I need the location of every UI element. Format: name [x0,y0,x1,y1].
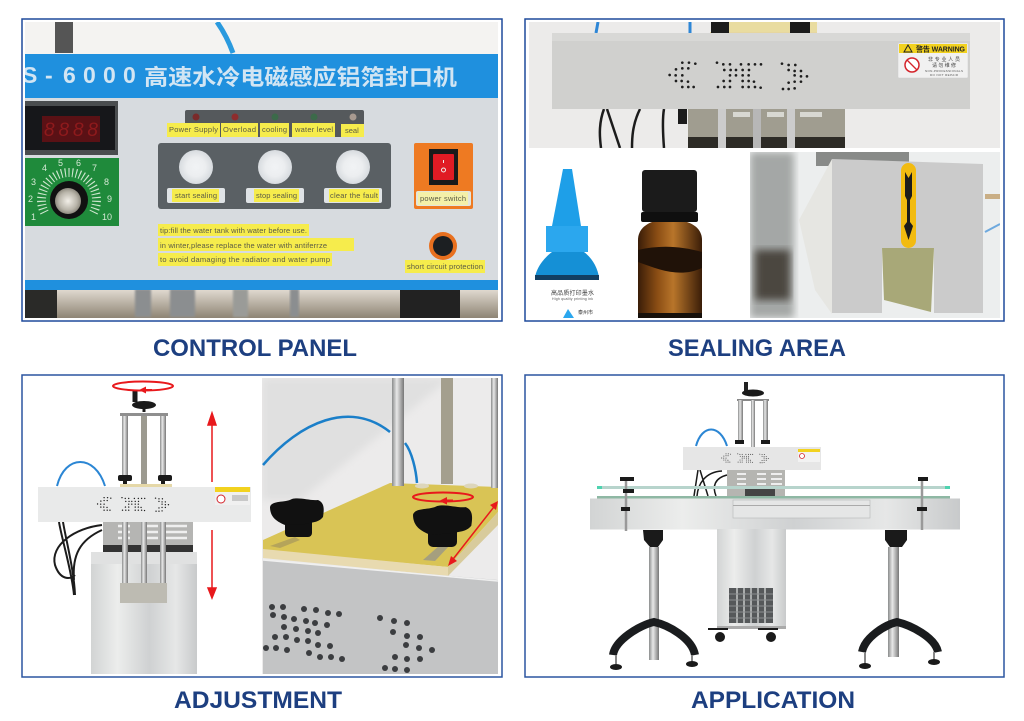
green timer dial: 10 [102,212,112,222]
short circuit protection [405,232,485,273]
amber glass bottle [638,170,702,318]
heading: application: APPLICATION [691,687,855,714]
sealing head photo: 请勿维修 [932,62,956,69]
heading: adjustment: ADJUSTMENT [174,687,342,714]
blue title band with machine model [22,54,498,290]
sealing head photo [529,22,1000,148]
rotation arrow [113,382,173,394]
indicator lights with labels: Overload [223,125,256,134]
close-up of sealing head tunnel [750,152,1000,318]
digital display [25,101,118,155]
close-up of adjustment knobs [262,378,498,674]
blue ink bottle [535,169,599,318]
control buttons: start sealing [175,191,217,200]
blue ink bottle: 高品质打印墨水 [551,289,594,297]
full machine on conveyor [590,382,960,670]
green timer dial: 2 [28,194,33,204]
tip text: to avoid damaging the radiator and water pump [160,255,330,264]
blue title band with machine model: S-6000 [22,62,136,88]
power switch [414,143,473,209]
green timer dial: 6 [76,158,81,168]
control buttons [158,143,391,209]
indicator lights with labels: cooling [262,125,287,134]
head height adjustment view [38,390,251,674]
tip text [158,224,354,266]
tip text: tip:fill the water tank with water before use. [160,226,307,235]
heading: sealing area: SEALING AREA [668,335,846,362]
heading: control panel: CONTROL PANEL [153,335,357,362]
indicator lights with labels [167,110,364,137]
blue ink bottle: 泰州市 [578,309,593,316]
green timer dial: 8 [104,177,109,187]
green timer dial: 7 [92,163,97,173]
blue title band with machine model: 高速水冷电磁感应铝箔封口机 [144,65,457,90]
panel: application [525,375,1004,677]
indicator lights with labels: Power Supply [169,125,218,134]
blue ink bottle: High quality printing ink [552,297,593,301]
sealing head photo: 警告 WARNING [916,44,966,54]
sealing head photo: DO NOT REPAIR [930,73,959,77]
green timer dial: 1 [31,212,36,222]
indicator lights with labels: water level [294,125,333,134]
green timer dial: 5 [58,158,63,168]
control buttons: clear the fault [330,191,379,200]
sealing head photo: 非专业人员 [928,56,960,63]
green timer dial: 4 [42,163,47,173]
sealing head photo: NON-PROFESSIONALS [925,69,963,73]
green timer dial [25,158,119,226]
panel: control panel [22,19,502,321]
tip text: in winter,please replace the water with antiferrze [160,241,327,250]
green timer dial: 9 [107,194,112,204]
vertical arrow down [208,530,216,598]
power switch: power switch [420,194,466,203]
indicator lights with labels: seal [345,126,359,135]
green timer dial: 3 [31,177,36,187]
vertical arrow up [208,413,216,482]
control buttons: stop sealing [256,191,297,200]
panel: adjustment [22,375,502,677]
panel: sealing area [525,19,1004,321]
short circuit protection: short circuit protection [407,262,483,271]
digital display: 8888 [44,120,98,141]
